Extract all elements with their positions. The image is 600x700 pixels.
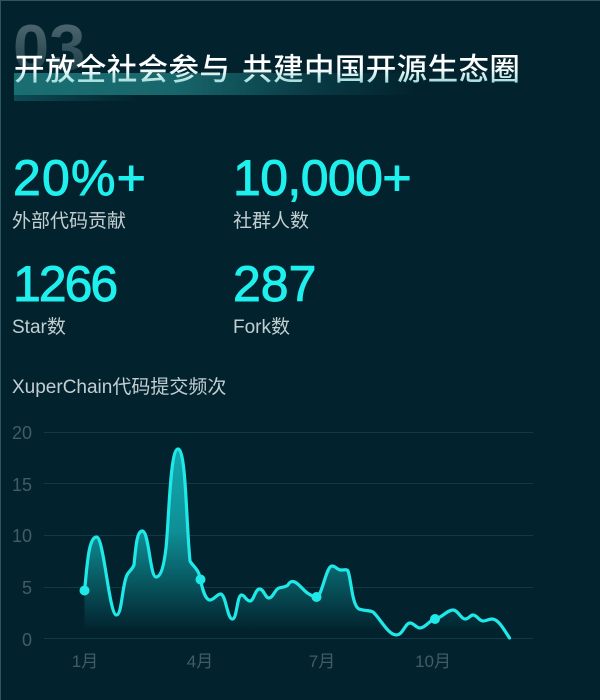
value: 287 [233, 256, 316, 312]
label: 外部代码贡献 [12, 211, 126, 232]
y axis labels: 5 [22, 578, 32, 598]
y axis labels: 0 [22, 630, 32, 650]
y axis labels: 10 [12, 526, 32, 546]
x axis labels: 10月 [415, 652, 451, 671]
value: 10,000+ [233, 150, 411, 206]
label: Fork数 [233, 317, 290, 338]
y axis labels [12, 423, 32, 650]
trend line [84, 449, 510, 638]
value: 1266 [13, 256, 116, 312]
area fill [84, 449, 510, 638]
x axis labels: 7月 [309, 652, 335, 671]
section number 03: 03 [13, 11, 85, 84]
value: 20%+ [13, 150, 147, 206]
title: 开放全社会参与 共建中国开源生态圈 [14, 53, 520, 87]
title band [14, 73, 414, 95]
y axis labels: 15 [12, 475, 32, 495]
stat: forks [233, 256, 316, 338]
data point markers [80, 574, 440, 624]
x axis labels [72, 652, 451, 671]
grid lines [44, 432, 533, 638]
title band lower edge [14, 95, 139, 101]
y axis labels: 20 [12, 423, 32, 443]
stat: stars [12, 256, 116, 338]
chart heading: XuperChain代码提交频次 [12, 377, 226, 398]
label: 社群人数 [233, 211, 309, 232]
x axis labels: 1月 [72, 652, 98, 671]
label: Star数 [12, 317, 66, 338]
x axis labels: 4月 [187, 652, 213, 671]
line chart: commit frequency [12, 423, 533, 671]
stat: external code contribution [12, 150, 147, 232]
stat: community size [233, 150, 411, 232]
